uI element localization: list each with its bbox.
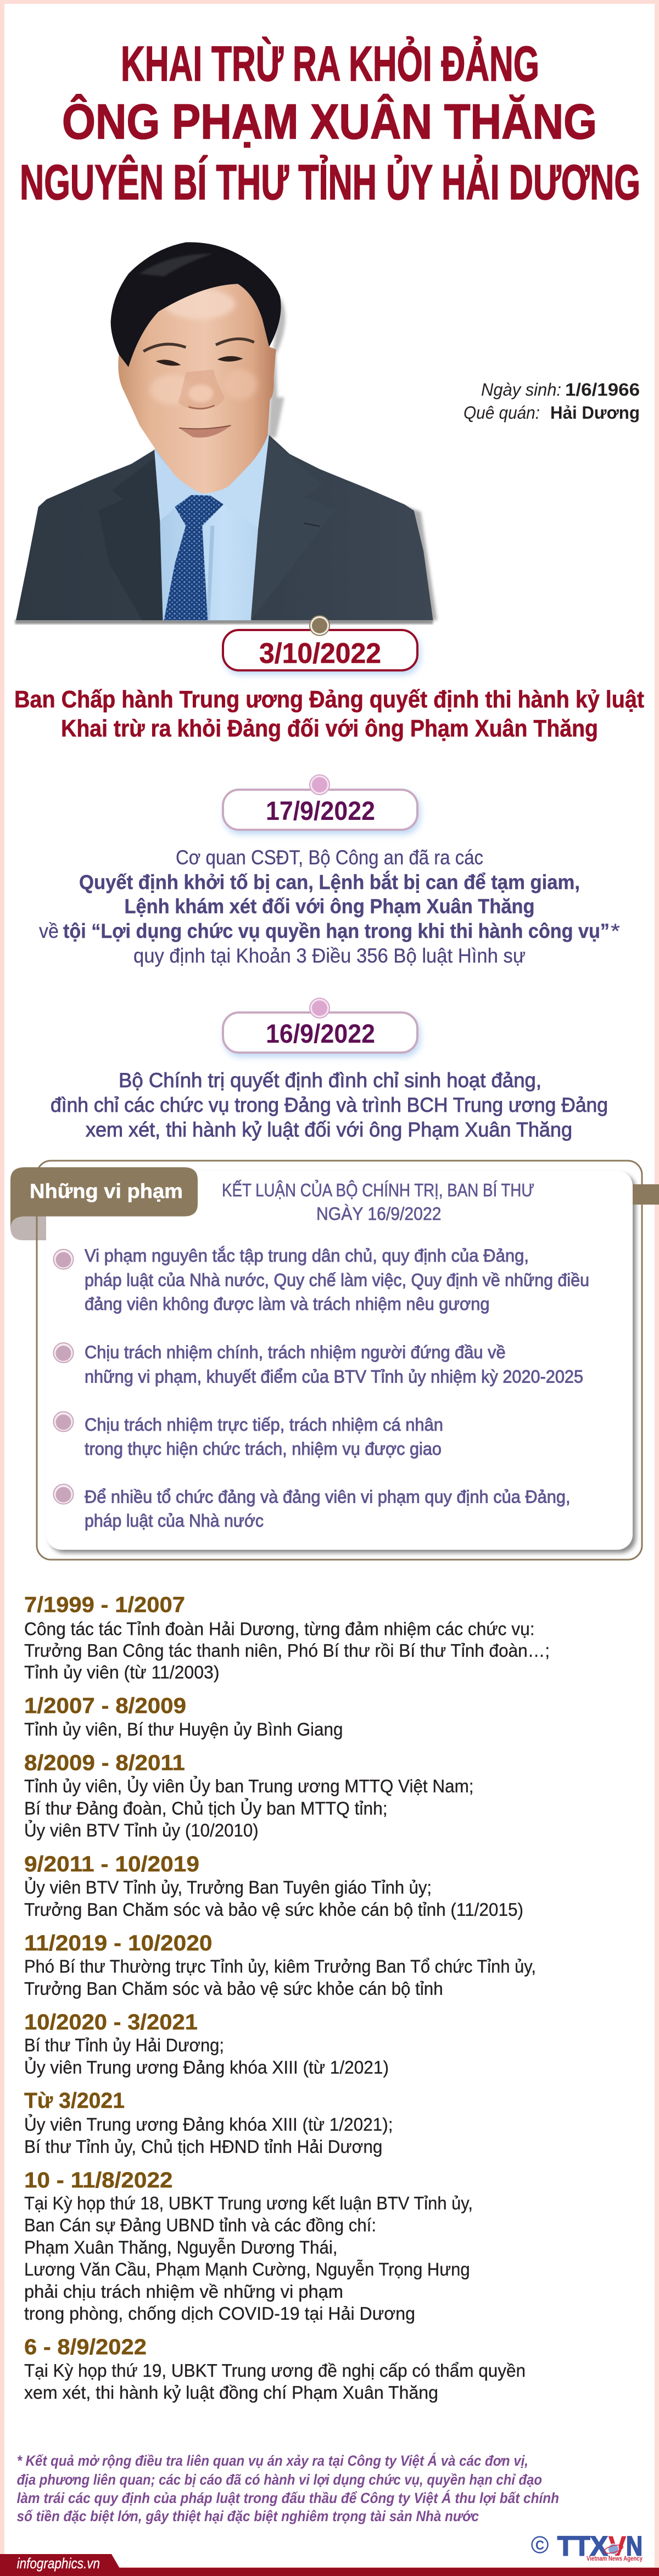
footnote: địa phương liên quan; các bị cáo đã có hành vi lợi dụng chức vụ, quyền hạn chỉ đạo [17, 2472, 542, 2488]
decision text 3/10/2022: Khai trừ ra khỏi Đảng đối với ông Phạm Xuân Thăng [61, 715, 598, 742]
career entry 8/2009 - 8/2011: Tỉnh ủy viên, Ủy viên Ủy ban Trung ương MTTQ Việt Nam; [24, 1776, 473, 1796]
career entry 10 - 11/8/2022 [24, 2168, 473, 2324]
text block 16/9/2022: Bộ Chính trị quyết định đình chỉ sinh hoạt đảng, [119, 1069, 541, 1092]
career entry 10 - 11/8/2022: phải chịu trách nhiệm về những vi phạm [24, 2281, 343, 2302]
text block 17/9/2022: tội “Lợi dụng chức vụ quyền hạn trong khi thi hành công vụ” [63, 920, 610, 942]
career entry 11/2019 - 10/2020: Phó Bí thư Thường trực Tỉnh ủy, kiêm Trưởng Ban Tổ chức Tỉnh ủy, [24, 1956, 536, 1977]
text block 17/9/2022: về [39, 920, 59, 942]
title: ÔNG PHẠM XUÂN THĂNG [62, 93, 597, 149]
violation item 1: pháp luật của Nhà nước, Quy chế làm việc, Quy định về những điều [85, 1270, 589, 1290]
panel heading: KẾT LUẬN CỦA BỘ CHÍNH TRỊ, BAN BÍ THƯ [222, 1180, 534, 1200]
right ribbon [633, 1184, 659, 1205]
career entry 6 - 8/9/2022: Tại Kỳ họp thứ 19, UBKT Trung ương đề nghị cấp có thẩm quyền [24, 2360, 526, 2381]
career entry 11/2019 - 10/2020 [24, 1931, 536, 1999]
career entry 8/2009 - 8/2011 [24, 1751, 473, 1841]
career entry 11/2019 - 10/2020: 11/2019 - 10/2020 [24, 1931, 213, 1955]
date badge 17/9/2022: 17/9/2022 [266, 797, 375, 826]
date badge 16/9/2022: 16/9/2022 [266, 1020, 375, 1049]
violation item 1 [54, 1246, 589, 1314]
footnote: * Kết quả mở rộng điều tra liên quan vụ án xảy ra tại Công ty Việt Á và các đơn vị, [17, 2452, 528, 2469]
career entry 10 - 11/8/2022: Ban Cán sự Đảng UBND tỉnh và các đồng chí: [24, 2215, 376, 2235]
violation item 3: trong thực hiện chức trách, nhiệm vụ được giao [85, 1439, 442, 1459]
text block 17/9/2022 [39, 846, 620, 967]
personal info: Hải Dương [550, 403, 640, 423]
date badge 3/10/2022: 3/10/2022 [259, 638, 381, 670]
date badge 16/9/2022 [223, 998, 420, 1057]
career entry from 3/2021: Ủy viên Trung ương Đảng khóa XIII (từ 1/2021); [24, 2114, 393, 2135]
violation item 2: Chịu trách nhiệm chính, trách nhiệm người đứng đầu về [85, 1342, 506, 1362]
career entry 7/1999 - 1/2007: 7/1999 - 1/2007 [24, 1593, 185, 1617]
personal info: Ngày sinh: [481, 380, 561, 400]
personal info: Quê quán: [463, 403, 540, 423]
violation item 4 [54, 1484, 570, 1531]
career entry 10 - 11/8/2022: Lương Văn Cầu, Phạm Mạnh Cường, Nguyễn Trọng Hưng [24, 2259, 470, 2280]
panel: violations [10, 1161, 659, 1560]
career timeline [24, 1593, 550, 2403]
career entry 9/2011 - 10/2019: Ủy viên BTV Tỉnh ủy, Trưởng Ban Tuyên giáo Tỉnh ủy; [24, 1877, 432, 1898]
career entry 8/2009 - 8/2011: Ủy viên BTV Tỉnh ủy (10/2010) [24, 1820, 259, 1841]
panel heading [222, 1180, 534, 1224]
career entry from 3/2021 [24, 2089, 393, 2157]
footnote: làm trái các quy định của pháp luật trong đấu thầu để Công ty Việt Á thu lợi bất chính [17, 2489, 559, 2506]
career entry 10 - 11/8/2022: Phạm Xuân Thăng, Nguyễn Dương Thái, [24, 2237, 337, 2257]
footer bar [0, 2554, 659, 2576]
date badge 17/9/2022 [223, 775, 420, 834]
violation item 3: Chịu trách nhiệm trực tiếp, trách nhiệm cá nhân [85, 1415, 443, 1435]
footnote [17, 2452, 559, 2524]
career entry 10 - 11/8/2022: 10 - 11/8/2022 [24, 2168, 172, 2192]
career entry 8/2009 - 8/2011: 8/2009 - 8/2011 [24, 1751, 185, 1775]
career entry 10/2020 - 3/2021 [24, 2010, 389, 2077]
career entry 1/2007 - 8/2009: 1/2007 - 8/2009 [24, 1694, 186, 1718]
logo: TTXVN: C [535, 2538, 544, 2553]
logo: TTXVN: N [626, 2531, 643, 2562]
career entry 10/2020 - 3/2021: 10/2020 - 3/2021 [24, 2010, 198, 2034]
logo: TTXVN: TTX [557, 2531, 608, 2562]
violation item 1: đảng viên không được làm và trách nhiệm nêu gương [85, 1294, 490, 1314]
career entry from 3/2021: Bí thư Tỉnh ủy, Chủ tịch HĐND tỉnh Hải Dương [24, 2136, 382, 2157]
text block 16/9/2022 [51, 1069, 608, 1141]
text block 17/9/2022: Quyết định khởi tố bị can, Lệnh bắt bị can để tạm giam, [79, 870, 580, 893]
career entry 1/2007 - 8/2009: Tỉnh ủy viên, Bí thư Huyện ủy Bình Giang [24, 1719, 343, 1739]
career entry 10 - 11/8/2022: trong phòng, chống dịch COVID-19 tại Hải Dương [24, 2303, 415, 2324]
career entry 7/1999 - 1/2007 [24, 1593, 550, 1683]
personal info: 1/6/1966 [565, 380, 640, 400]
footer bar: infographics.vn [17, 2555, 100, 2572]
violation item 4: pháp luật của Nhà nước [85, 1511, 264, 1531]
text block 16/9/2022: đình chỉ các chức vụ trong Đảng và trình BCH Trung ương Đảng [51, 1094, 608, 1116]
career entry 8/2009 - 8/2011: Bí thư Đảng đoàn, Chủ tịch Ủy ban MTTQ tỉnh; [24, 1798, 388, 1819]
violation item 2 [54, 1342, 583, 1387]
text block 17/9/2022: quy định tại Khoản 3 Điều 356 Bộ luật Hình sự [133, 944, 526, 967]
tab: Những vi phạm [10, 1167, 198, 1229]
tab fold [10, 1202, 46, 1240]
violation item 2: những vi phạm, khuyết điểm của BTV Tỉnh ủy nhiệm kỳ 2020-2025 [85, 1367, 583, 1387]
career entry 7/1999 - 1/2007: Công tác tác Tỉnh đoàn Hải Dương, từng đảm nhiệm các chức vụ: [24, 1618, 535, 1639]
text block 17/9/2022: Cơ quan CSĐT, Bộ Công an đã ra các [176, 846, 483, 869]
text block 16/9/2022: xem xét, thi hành kỷ luật đối với ông Phạm Xuân Thăng [86, 1118, 572, 1141]
title [20, 36, 640, 210]
personal info [463, 380, 640, 423]
career entry 1/2007 - 8/2009 [24, 1694, 343, 1739]
text block 17/9/2022: Lệnh khám xét đối với ông Phạm Xuân Thăng [124, 895, 535, 918]
violation item 4: Để nhiều tổ chức đảng và đảng viên vi phạm quy định của Đảng, [85, 1487, 570, 1507]
text block 17/9/2022: * [611, 920, 620, 942]
logo: TTXVN: Vietnam News Agency [587, 2555, 643, 2562]
violation item 3 [54, 1411, 443, 1459]
career entry 6 - 8/9/2022: 6 - 8/9/2022 [24, 2335, 147, 2359]
career entry 10 - 11/8/2022: Tại Kỳ họp thứ 18, UBKT Trung ương kết luận BTV Tỉnh ủy, [24, 2193, 473, 2213]
decision text 3/10/2022 [14, 686, 644, 742]
career entry 7/1999 - 1/2007: Trưởng Ban Công tác thanh niên, Phó Bí thư rồi Bí thư Tỉnh đoàn…; [24, 1640, 550, 1661]
logo: TTXVN [532, 2531, 643, 2562]
career entry 9/2011 - 10/2019: 9/2011 - 10/2019 [24, 1852, 199, 1876]
career entry 6 - 8/9/2022 [24, 2335, 526, 2403]
date badge 3/10/2022 [223, 616, 420, 674]
logo: TTXVN: V [608, 2531, 627, 2562]
footnote: số tiền đặc biệt lớn, gây thiệt hại đặc biệt nghiêm trọng tài sản Nhà nước [17, 2508, 479, 2524]
career entry 11/2019 - 10/2020: Trưởng Ban Chăm sóc và bảo vệ sức khỏe cán bộ tỉnh [24, 1978, 443, 1999]
portrait photo illustration [15, 242, 437, 624]
career entry 7/1999 - 1/2007: Tỉnh ủy viên (từ 11/2003) [24, 1662, 220, 1683]
panel heading: NGÀY 16/9/2022 [316, 1203, 442, 1224]
career entry 6 - 8/9/2022: xem xét, thi hành kỷ luật đồng chí Phạm Xuân Thăng [24, 2382, 438, 2403]
career entry 10/2020 - 3/2021: Bí thư Tỉnh ủy Hải Dương; [24, 2035, 224, 2055]
violation item 1: Vi phạm nguyên tắc tập trung dân chủ, quy định của Đảng, [85, 1246, 529, 1265]
career entry from 3/2021: Từ 3/2021 [24, 2089, 125, 2113]
career entry 10/2020 - 3/2021: Ủy viên Trung ương Đảng khóa XIII (từ 1/2021) [24, 2057, 389, 2077]
career entry 9/2011 - 10/2019: Trưởng Ban Chăm sóc và bảo vệ sức khỏe cán bộ tỉnh (11/2015) [24, 1899, 523, 1920]
tab: Những vi phạm: Những vi phạm [30, 1180, 183, 1202]
career entry 9/2011 - 10/2019 [24, 1852, 523, 1920]
